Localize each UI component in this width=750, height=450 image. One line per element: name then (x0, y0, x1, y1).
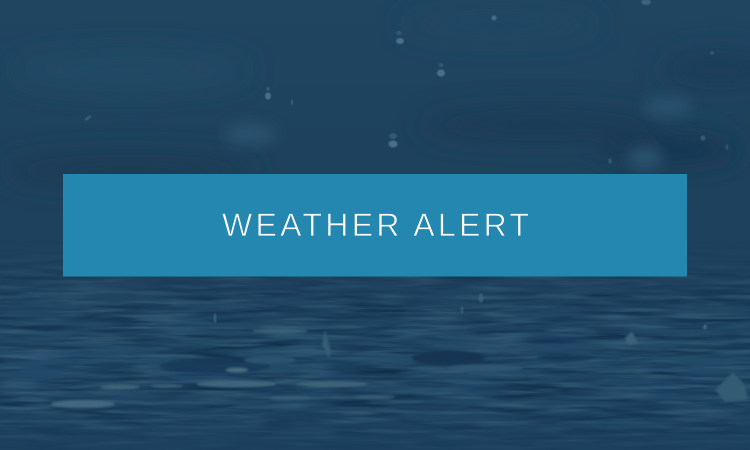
light ripples (51, 400, 115, 408)
title: WEATHER ALERT (222, 207, 529, 243)
dark puddles (160, 358, 270, 374)
rain drops (84, 0, 728, 330)
